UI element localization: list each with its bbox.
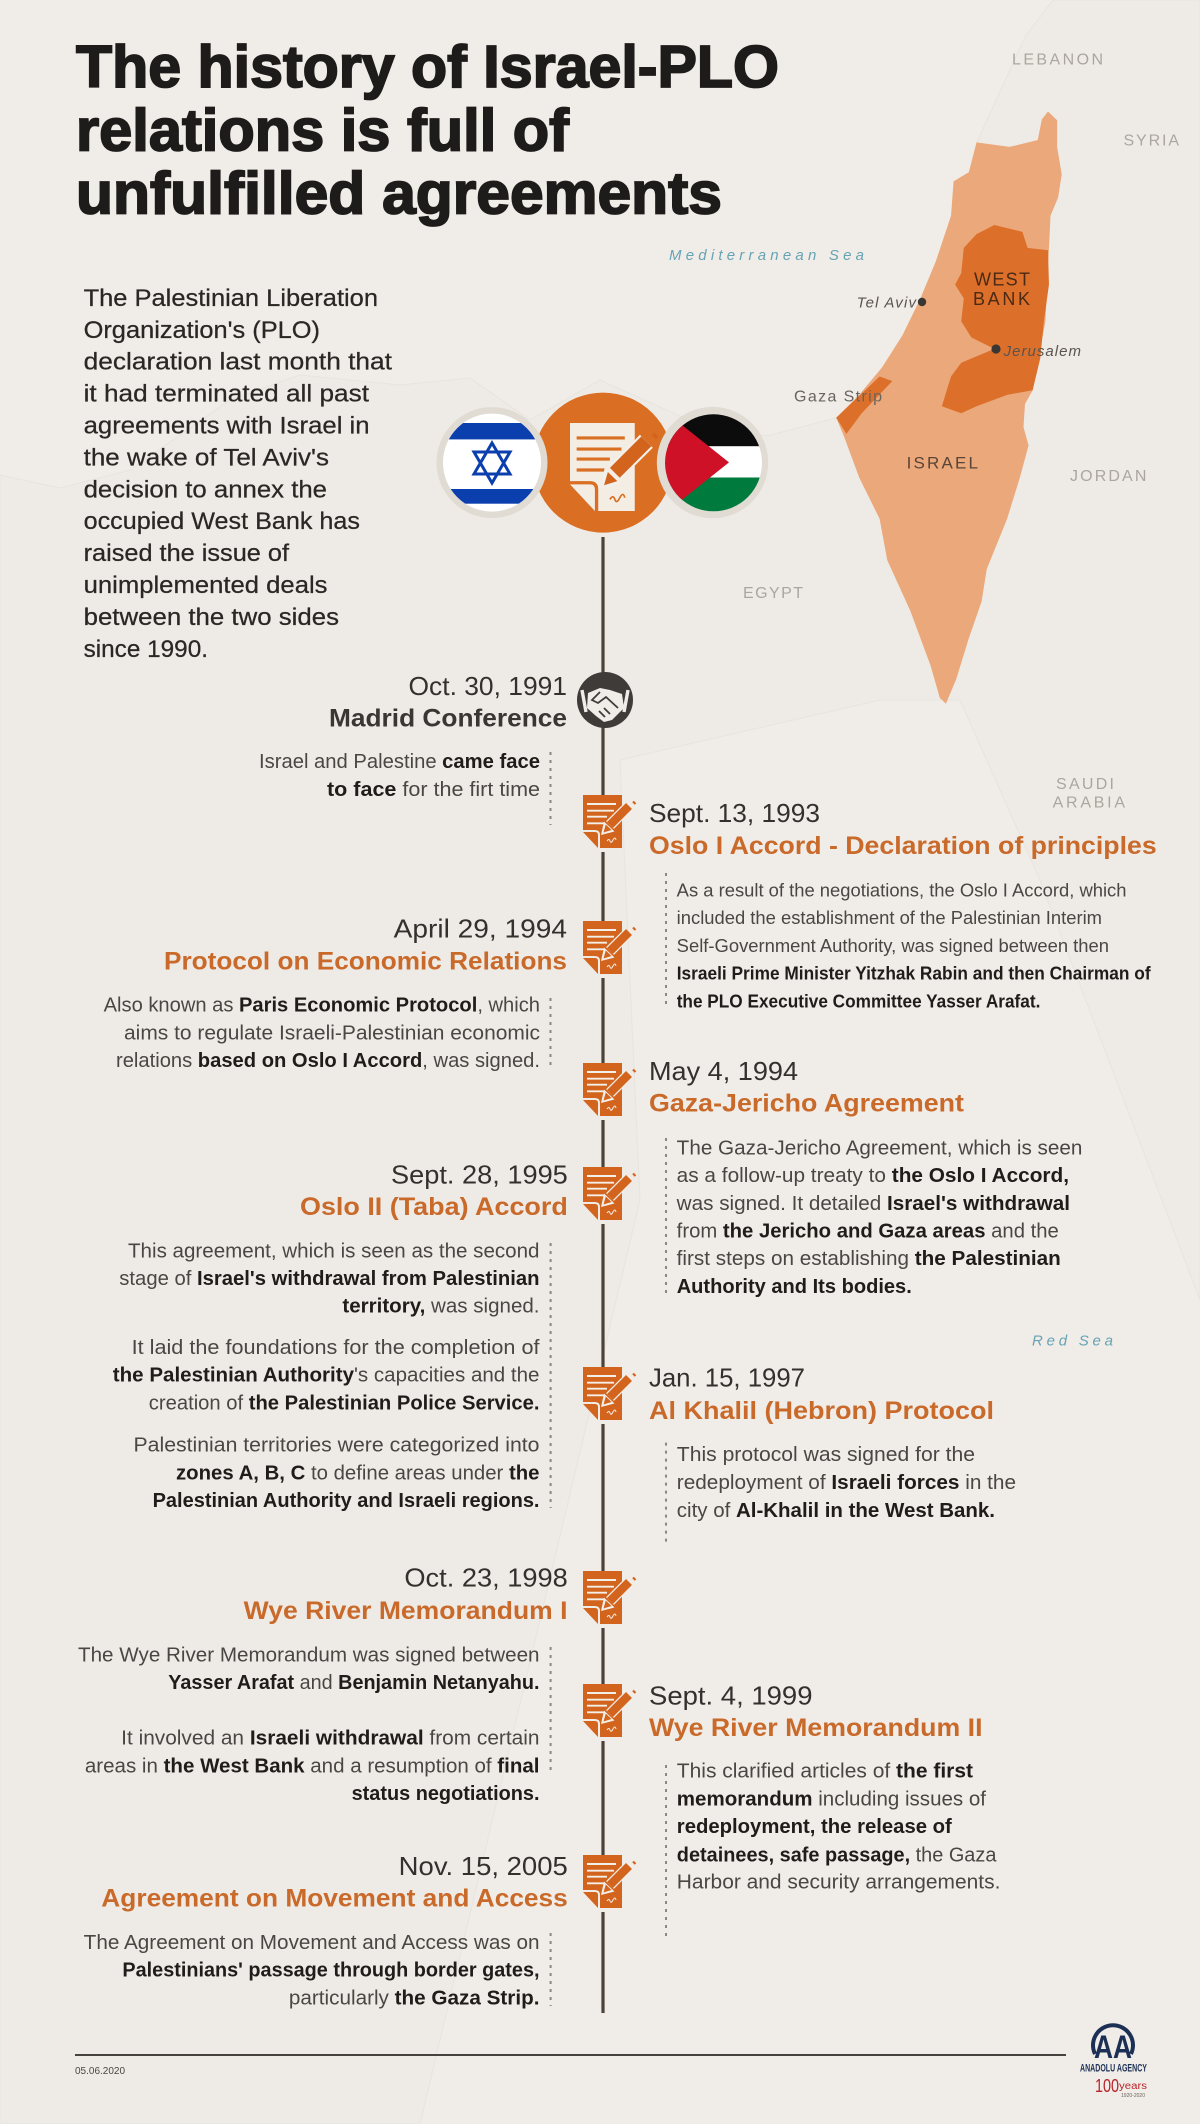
logo: Anadolu Agency: 1920-2020 [1121,2093,1145,2099]
description: Yasser Arafat and Benjamin Netanyahu. [168,1672,540,1694]
map labels: EGYPT [743,585,803,602]
title [76,34,779,226]
logo: Anadolu Agency [1080,2025,1147,2099]
intro paragraph: unimplemented deals [84,572,327,599]
description: The Wye River Memorandum was signed between [78,1645,540,1667]
description: creation of the Palestinian Police Service. [149,1392,540,1414]
icon: document [583,1367,636,1424]
map labels [669,51,1179,1350]
description: Also known as Paris Economic Protocol, which [104,995,540,1017]
description: Harbor and security arrangements. [677,1872,1000,1894]
intro paragraph: occupied West Bank has [84,508,360,535]
heading: Wye River Memorandum I [244,1597,567,1625]
event: Oslo I Accord [583,795,1157,1011]
description: stage of Israel's withdrawal from Palestinian [119,1268,540,1290]
intro paragraph: The Palestinian Liberation [84,285,378,312]
description: relations based on Oslo I Accord, was signed. [116,1050,540,1072]
description: particularly the Gaza Strip. [289,1987,540,2009]
event: Protocol on Economic Relations [104,914,636,1072]
description [666,1443,1016,1546]
logo: Anadolu Agency: ANADOLU AGENCY [1080,2063,1147,2075]
icon: document [583,1063,636,1120]
date: April 29, 1994 [394,914,567,944]
description: Self-Government Authority, was signed between then [677,936,1109,956]
timeline vertical line [601,537,605,2013]
icon: handshake [577,672,633,728]
description: was signed. It detailed Israel's withdrawal [676,1193,1070,1215]
date: Sept. 4, 1999 [649,1680,812,1710]
intro paragraph: agreements with Israel in [84,413,370,440]
description: This clarified articles of the first [677,1760,973,1782]
title: relations is full of [76,98,569,164]
intro paragraph: decision to annex the [84,476,327,503]
date: Sept. 28, 1995 [391,1159,568,1189]
event: Oslo II (Taba) Accord [113,1159,636,1512]
map: Israel and Palestinian territories [836,112,1062,704]
intro paragraph: the wake of Tel Aviv's [84,444,329,471]
intro paragraph: declaration last month that [84,348,392,376]
description: the PLO Executive Committee Yasser Arafat. [677,991,1040,1011]
event: Al Khalil (Hebron) Protocol [583,1362,1016,1546]
description [84,1932,551,2009]
map labels: LEBANON [1012,51,1103,68]
heading: Protocol on Economic Relations [164,947,567,975]
description: zones A, B, C to define areas under the [176,1462,540,1484]
heading: Oslo II (Taba) Accord [300,1193,568,1221]
description: This agreement, which is seen as the second [128,1240,540,1262]
map labels: Gaza Strip [794,389,882,406]
description: status negotiations. [352,1783,540,1805]
event: Gaza-Jericho Agreement [583,1056,1082,1298]
intro paragraph: it had terminated all past [84,381,369,408]
event: Wye River Memorandum I [78,1563,636,1805]
description: It laid the foundations for the completion of [132,1337,540,1359]
date: May 4, 1994 [649,1056,798,1086]
icon: document [583,795,636,852]
description: Authority and Its bodies. [677,1276,912,1298]
description: the Palestinian Authority 's capacities and the [113,1365,540,1387]
description: The Gaza-Jericho Agreement, which is seen [677,1137,1082,1159]
description: as a follow-up treaty to the Oslo I Accord, [677,1165,1069,1187]
date: Jan. 15, 1997 [649,1362,805,1392]
description: Israeli Prime Minister Yitzhak Rabin and then Chairman of [677,964,1152,984]
icon: signed document large [570,423,657,518]
central agreement badge [533,393,673,533]
heading: Al Khalil (Hebron) Protocol [649,1397,994,1425]
heading: Gaza-Jericho Agreement [649,1090,965,1118]
map labels: Mediterranean Sea [669,247,864,264]
intro paragraph: since 1990. [84,636,208,663]
description [666,873,1152,1011]
icon: document [583,1571,636,1628]
map labels: BANK [973,289,1030,309]
map labels: SYRIA [1124,132,1179,150]
logo: Anadolu Agency: AA [1094,2029,1132,2065]
description: Israel and Palestine came face [259,751,540,773]
icon: Palestinian flag [657,407,770,518]
description: city of Al-Khalil in the West Bank. [677,1500,995,1522]
map labels: ARABIA [1053,794,1125,812]
heading: Madrid Conference [329,705,567,733]
description [113,1240,551,1512]
map labels: Red Sea [1032,1333,1113,1350]
map labels: WEST [974,270,1030,290]
description: Palestinian Authority and Israeli regions. [153,1490,540,1512]
intro paragraph: Organization's (PLO) [84,317,320,344]
heading: Oslo I Accord - Declaration of principles [649,832,1157,860]
map labels: ISRAEL [907,453,978,472]
title: The history of Israel-PLO [76,34,779,100]
logo: Anadolu Agency: years [1119,2081,1147,2092]
map: Israel shape [836,112,1062,704]
description [104,995,550,1072]
description [78,1645,551,1805]
description: Palestinians' passage through border gates, [122,1960,540,1982]
description: aims to regulate Israeli-Palestinian economic [124,1022,540,1044]
icon: document [583,921,636,978]
event: Agreement on Movement and Access [84,1851,635,2009]
description [259,751,550,825]
orange circle [533,393,673,533]
heading: Agreement on Movement and Access [101,1885,568,1913]
footer date: 05.06.2020 [75,2066,125,2077]
map labels: JORDAN [1070,468,1146,485]
intro paragraph: between the two sides [84,604,339,631]
description: redeployment, the release of [677,1816,952,1838]
date: Oct. 30, 1991 [408,671,567,701]
icon: Israeli flag [436,407,548,518]
date: Oct. 23, 1998 [404,1563,568,1593]
map labels: Tel Aviv [857,295,918,312]
date: Nov. 15, 2005 [399,1851,568,1881]
event: Wye River Memorandum II [583,1680,1000,1936]
title: unfulfilled agreements [76,160,722,226]
description: The Agreement on Movement and Access was on [84,1932,539,1954]
description [666,1137,1082,1298]
description: first steps on establishing the Palestinian [677,1248,1061,1270]
description [666,1760,1000,1936]
description: included the establishment of the Palestinian Interim [677,908,1102,928]
map: West Bank shape [942,225,1049,413]
description: to face for the firt time [327,779,540,801]
icon: document [583,1167,636,1224]
description: As a result of the negotiations, the Oslo I Accord, which [677,880,1126,900]
logo: Anadolu Agency: 100 [1095,2076,1119,2096]
description: detainees, safe passage, the Gaza [677,1844,997,1866]
map: Gaza Strip shape [836,376,892,434]
map labels: SAUDI [1056,776,1114,793]
date: Sept. 13, 1993 [649,798,820,828]
map labels: Jerusalem [1003,343,1081,360]
intro paragraph: raised the issue of [84,540,289,567]
description: territory, was signed. [342,1296,540,1318]
description: memorandum including issues of [677,1789,986,1811]
description: It involved an Israeli withdrawal from certain [121,1727,539,1749]
description: This protocol was signed for the [677,1444,975,1466]
heading: Wye River Memorandum II [649,1714,982,1742]
description: areas in the West Bank and a resumption of final [85,1755,540,1777]
footer rule [75,2054,1066,2056]
description: from the Jericho and Gaza areas and the [677,1221,1059,1243]
icon: document [583,1855,636,1912]
description: Palestinian territories were categorized into [134,1435,540,1457]
event: Madrid Conference [259,671,633,825]
description: redeployment of Israeli forces in the [677,1472,1016,1494]
intro paragraph [84,285,392,663]
icon: document [583,1684,636,1741]
